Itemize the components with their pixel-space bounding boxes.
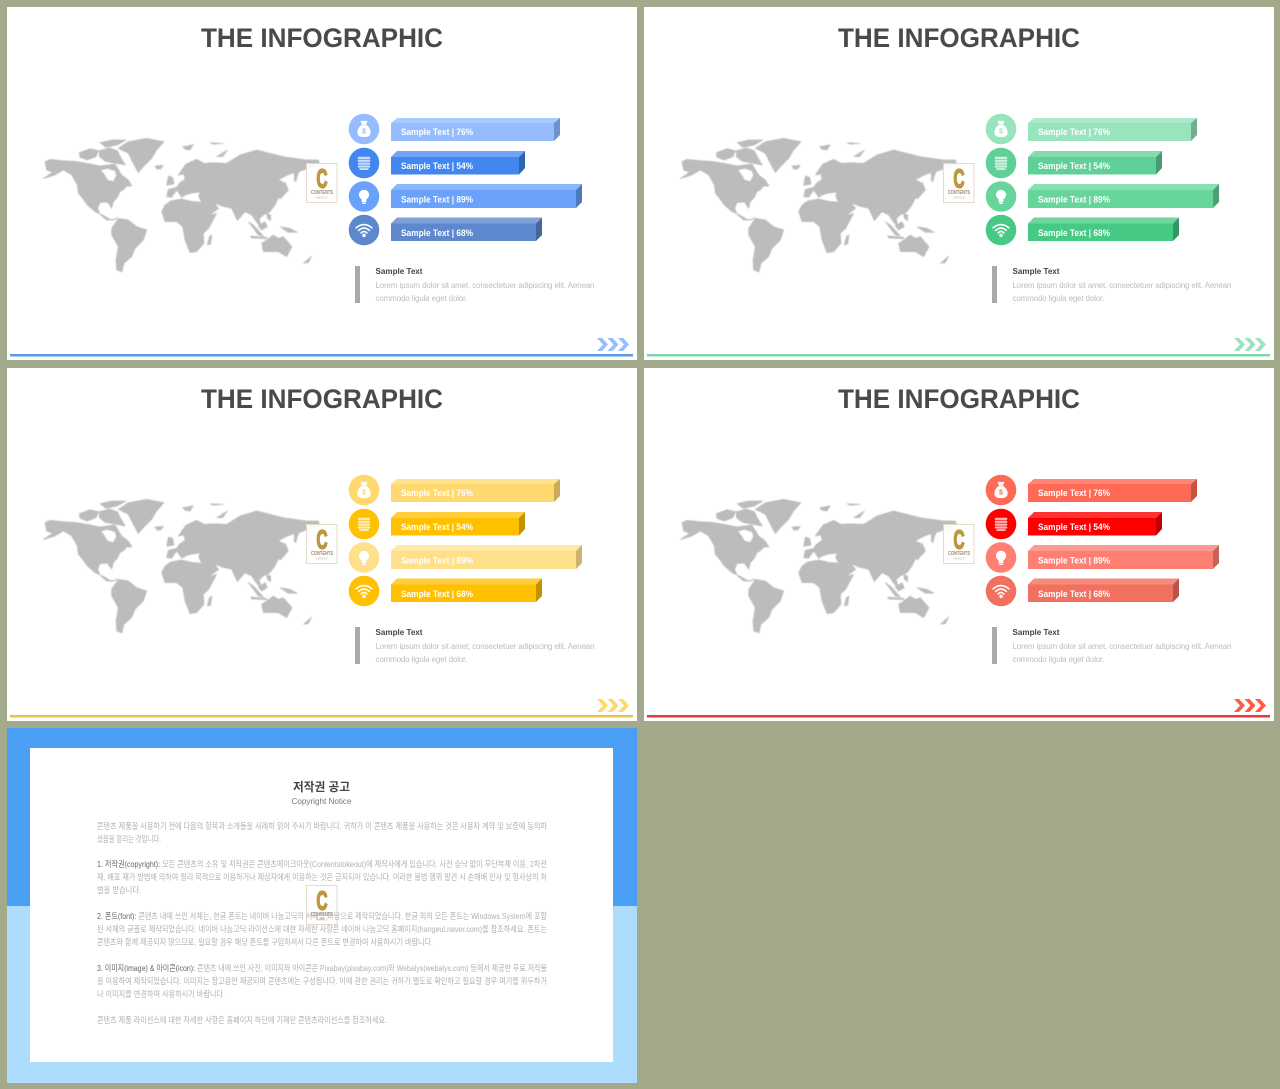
- bottom rule: [10, 715, 633, 718]
- world map: [680, 138, 957, 272]
- bar: 89%: [1028, 184, 1219, 208]
- icon: wifi: [349, 215, 379, 245]
- clause 1: copyright: [97, 859, 547, 895]
- world map: [680, 499, 957, 633]
- chevron arrows: [1234, 338, 1266, 351]
- world map: [43, 138, 320, 272]
- icon: money bag: $: [999, 490, 1003, 496]
- clause 3: image and icon: 나 이미지를 변경하여 사용하시기 바랍니다.: [97, 989, 225, 999]
- bar: 68%: Sample Text | 68%: [1038, 228, 1110, 238]
- icon: coin stack: [986, 509, 1016, 539]
- icon: coin stack: [986, 148, 1016, 178]
- bar: 68%: [1028, 578, 1179, 602]
- world map: [43, 499, 320, 633]
- panel: yellow infographic: [7, 368, 637, 721]
- text block: [992, 627, 1232, 664]
- bar: 68%: Sample Text | 68%: [401, 228, 473, 238]
- icon: money bag: $: [999, 128, 1003, 136]
- watermark logo: MAKE OUT: [316, 918, 328, 922]
- text block: Lorem ipsum dolor sit amet, consectetuer adipiscing elit. Aenean: [1012, 642, 1232, 651]
- bar: 54%: Sample Text | 54%: [401, 161, 473, 171]
- icon: wifi: [349, 576, 379, 606]
- bar: 68%: Sample Text | 68%: [401, 589, 473, 599]
- bar: 89%: [391, 545, 582, 569]
- chevron arrows: [1234, 699, 1266, 712]
- bar: 76%: [1028, 118, 1197, 141]
- watermark logo: MAKE OUT: [953, 196, 965, 200]
- clause 2: font: 된 서체의 글꼴로 제작되었습니다. 네이버 나눔고딕 라이선스에 대한 자세한 사항은 네이버 나눔고딕 홈페이지(hangeul.naver.com)를 참조하세요. 폰트는: [97, 924, 547, 934]
- watermark logo: [306, 164, 337, 202]
- bar: 54%: Sample Text | 54%: [401, 522, 473, 532]
- watermark logo: C: [954, 164, 965, 194]
- bar: 89%: Sample Text | 89%: [1038, 556, 1110, 566]
- notice intro: [97, 821, 547, 844]
- bar: 89%: Sample Text | 89%: [1038, 194, 1110, 204]
- text block: Sample Text: [1012, 266, 1060, 276]
- text block: [992, 266, 1232, 303]
- watermark logo: C: [316, 164, 328, 194]
- icon: money bag: $: [362, 490, 366, 496]
- watermark logo: MAKE OUT: [316, 556, 328, 560]
- title: THE INFOGRAPHIC: [838, 384, 1080, 414]
- clause 2: font: [97, 911, 547, 947]
- bar: 89%: [1028, 545, 1219, 569]
- clause 1: copyright: 벌을 받습니다.: [97, 885, 141, 895]
- bar: 54%: [1028, 512, 1162, 536]
- bottom rule: [647, 354, 1270, 356]
- watermark logo: CONTENTS: [948, 551, 971, 557]
- icon: coin stack: [349, 509, 379, 539]
- watermark logo: MAKE OUT: [953, 556, 965, 560]
- notice intro: 셨음을 알리는 것입니다.: [97, 834, 161, 844]
- text block: commodo ligula eget dolor.: [376, 294, 468, 303]
- watermark logo: CONTENTS: [311, 912, 334, 918]
- icon: light bulb: [986, 181, 1016, 212]
- text block: Lorem ipsum dolor sit amet, consectetuer adipiscing elit. Aenean: [376, 281, 594, 290]
- bar: 76%: Sample Text | 76%: [401, 127, 473, 137]
- title: THE INFOGRAPHIC: [838, 23, 1080, 53]
- bottom rule: [647, 715, 1270, 718]
- icon: money bag: [349, 114, 379, 144]
- bar: 89%: [391, 184, 582, 208]
- text block: Sample Text: [376, 266, 423, 276]
- bar: 68%: [1028, 218, 1179, 241]
- closing note: 콘텐츠 제품 라이선스에 대한 자세한 사항은 홈페이지 하단에 기재된 콘텐츠라이선스를 참조하세요.: [97, 1015, 387, 1025]
- bar: 76%: [1028, 479, 1197, 502]
- text block: Sample Text: [376, 627, 423, 637]
- clause 1: copyright: 1. 저작권(copyright): 모든 콘텐츠의 소유 및 저작권은 콘텐츠메이크아웃(Contentstokeout)에 제작사에게 있습니다. 사전 승낙 없이 무단복제 이용, 2차전: [97, 859, 547, 869]
- bar: 89%: Sample Text | 89%: [401, 556, 473, 566]
- watermark logo: [306, 886, 337, 924]
- bar: 54%: [391, 151, 525, 174]
- panel: red infographic: [644, 368, 1274, 721]
- text block: [355, 627, 594, 664]
- watermark logo: [306, 524, 337, 564]
- watermark logo: C: [316, 524, 328, 554]
- watermark logo: C: [316, 886, 328, 916]
- clause 3: image and icon: 3. 이미지(image) & 아이콘(icon): 콘텐츠 내에 쓰인 사진, 이미지와 아이콘은 Pixabay(pixabay.com)와 Webalys(webalys.com) 등에서 제공한 무료 저작물: [97, 963, 547, 973]
- bar: 54%: [1028, 151, 1162, 174]
- clause 3: image and icon: [97, 963, 547, 999]
- notice subheading: Copyright Notice: [292, 796, 352, 806]
- bar: 89%: Sample Text | 89%: [401, 194, 473, 204]
- text block: commodo ligula eget dolor.: [1012, 655, 1104, 664]
- bar: 76%: Sample Text | 76%: [1038, 488, 1110, 498]
- notice heading: 저작권 공고: [293, 779, 350, 794]
- icon: wifi: [986, 215, 1016, 245]
- bar: 68%: [391, 218, 542, 241]
- bar: 68%: Sample Text | 68%: [1038, 589, 1110, 599]
- chevron arrows: [597, 338, 629, 351]
- icon: money bag: [986, 475, 1016, 505]
- panel: green infographic: [644, 7, 1274, 360]
- icon: money bag: [349, 475, 379, 505]
- clause 2: font: 2. 폰트(font): 콘텐츠 내에 쓰인 서체는, 한글 폰트는 네이버 나눔고딕의 서체를 바탕으로 제작되었습니다. 한글 외의 모든 폰트는 Windows System에 포함: [97, 911, 547, 921]
- text block: Lorem ipsum dolor sit amet, consectetuer adipiscing elit. Aenean: [1012, 281, 1232, 290]
- text block: commodo ligula eget dolor.: [376, 655, 468, 664]
- panel: copyright notice: [7, 728, 637, 1083]
- text block: commodo ligula eget dolor.: [1012, 294, 1104, 303]
- icon: light bulb: [349, 542, 379, 573]
- bar: 76%: [391, 118, 560, 141]
- panel: blue infographic: [7, 7, 637, 360]
- watermark logo: CONTENTS: [311, 551, 334, 557]
- clause 2: font: 콘텐츠와 함께 제공되지 않으므로, 필요할 경우 해당 폰트를 구입하셔서 다른 폰트로 변경하여 사용하시기 바랍니다.: [97, 937, 433, 947]
- bar: 76%: [391, 479, 560, 502]
- clause 1: copyright: 재, 배포 재가 방법에 의하여 영리 목적으로 이용하거나 제삼자에게 이용하는 것은 금지되어 있습니다. 이러한 불법 행위 발견 시 손해배 민사 및 형사상의 처: [97, 872, 547, 882]
- icon: money bag: $: [362, 128, 366, 136]
- icon: light bulb: [349, 181, 379, 212]
- text block: Sample Text: [1012, 627, 1060, 637]
- notice intro: 콘텐츠 제품을 사용하기 전에 다음의 항목과 소개들을 사례히 읽어 주시기 바랍니다. 귀하가 이 콘텐츠 제품을 사용하는 것은 사용자 계약 및 보증에 동의하: [97, 821, 547, 831]
- watermark logo: [944, 524, 974, 564]
- icon: coin stack: [349, 148, 379, 178]
- title: THE INFOGRAPHIC: [201, 23, 443, 53]
- icon: money bag: [986, 114, 1016, 144]
- chevron arrows: [597, 699, 629, 712]
- text block: [355, 266, 594, 303]
- text block: Lorem ipsum dolor sit amet, consectetuer adipiscing elit. Aenean: [376, 642, 594, 651]
- watermark logo: C: [954, 524, 965, 554]
- bar: 54%: [391, 512, 525, 536]
- icon: wifi: [986, 576, 1016, 606]
- bar: 68%: [391, 578, 542, 602]
- watermark logo: MAKE OUT: [316, 196, 328, 200]
- bottom rule: [10, 354, 633, 356]
- bar: 76%: Sample Text | 76%: [1038, 127, 1110, 137]
- watermark logo: CONTENTS: [948, 190, 971, 196]
- watermark logo: CONTENTS: [311, 190, 334, 196]
- watermark logo: [944, 164, 974, 202]
- bar: 54%: Sample Text | 54%: [1038, 161, 1110, 171]
- title: THE INFOGRAPHIC: [201, 384, 443, 414]
- bar: 76%: Sample Text | 76%: [401, 488, 473, 498]
- clause 3: image and icon: 을 이용하여 제작되었습니다. 이미지는 참고용만 제공되며 콘텐츠에는 구성됩니다. 이에 관한 권리는 귀하가 별도로 확인하고 필요할 경우 여기를 위두하거: [97, 976, 547, 986]
- icon: light bulb: [986, 542, 1016, 573]
- bar: 54%: Sample Text | 54%: [1038, 522, 1110, 532]
